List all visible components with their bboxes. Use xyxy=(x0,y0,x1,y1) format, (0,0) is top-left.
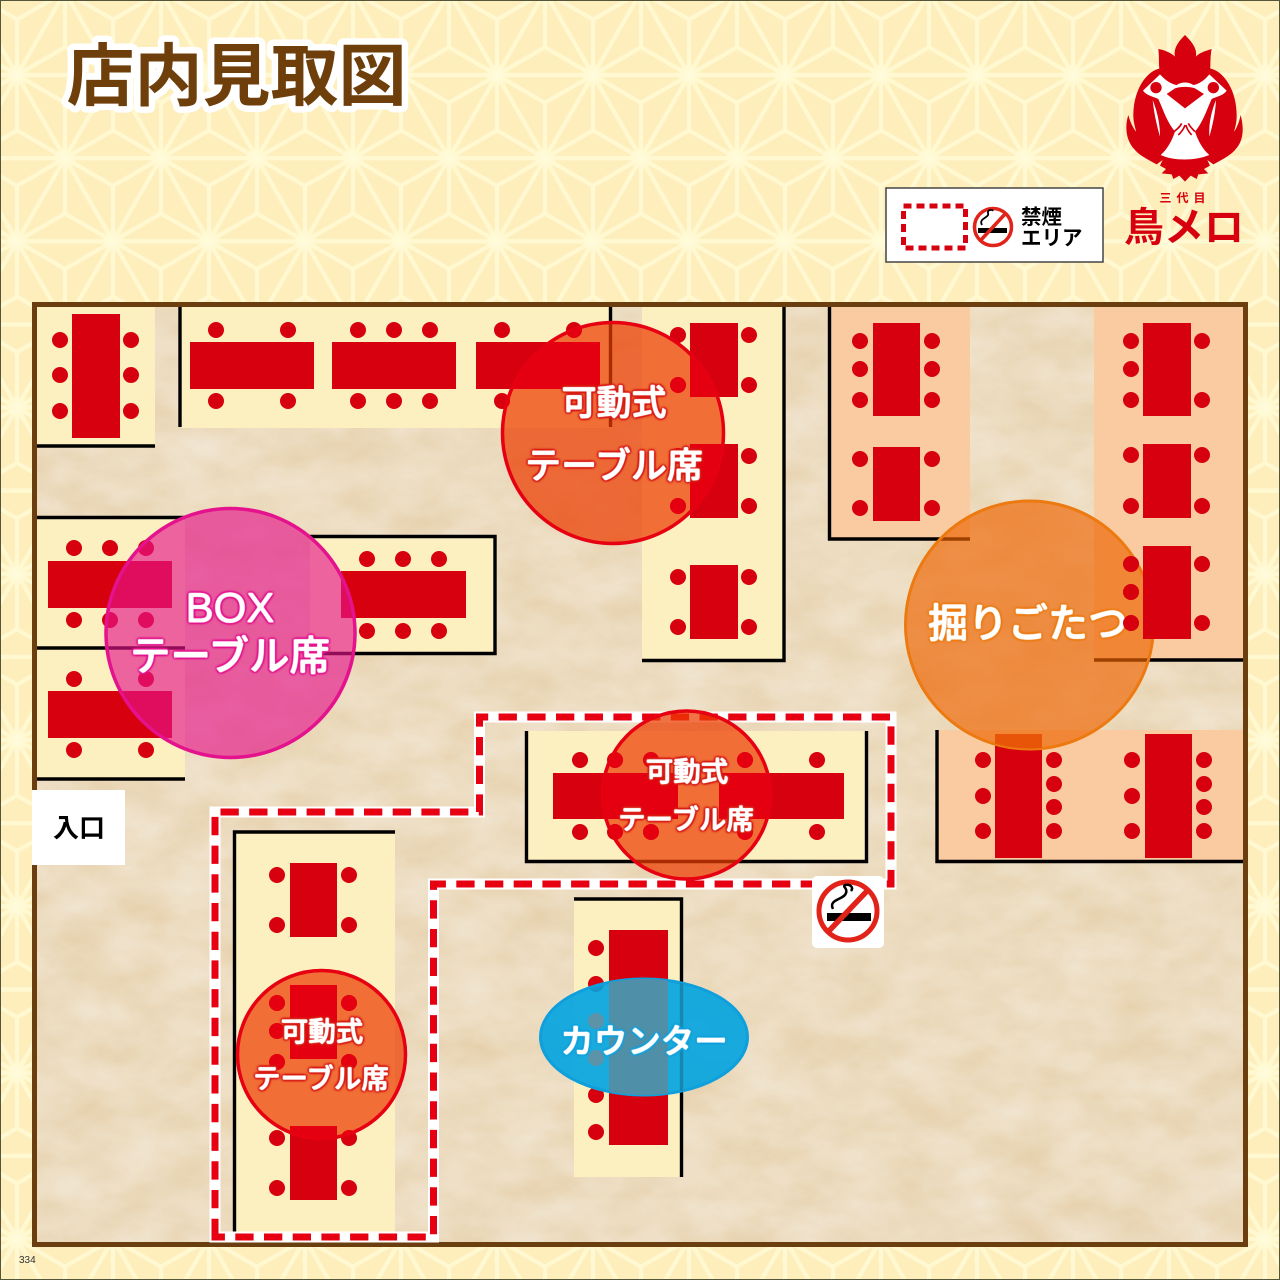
seats xyxy=(852,333,940,516)
panel: counter xyxy=(574,899,682,1177)
floor border xyxy=(34,304,1246,1244)
page number: 334 xyxy=(19,1255,36,1266)
legend dashed box xyxy=(904,206,966,248)
entrance label xyxy=(32,790,125,865)
callout: BOX table seats: BOX xyxy=(186,584,274,631)
title: 店内見取図 xyxy=(66,39,407,115)
no-smoking area dashed outline xyxy=(215,717,891,1237)
logo small text: 三代目 xyxy=(1159,191,1211,205)
seats xyxy=(52,332,139,419)
panel: horigotatsu bottom xyxy=(937,730,1243,862)
callout: movable table seats middle: 可動式 xyxy=(646,756,728,787)
legend text: 禁煙 xyxy=(1021,206,1062,229)
seats xyxy=(359,551,447,639)
panel: right column tables xyxy=(642,307,784,660)
callout: counter: カウンター xyxy=(560,1024,728,1061)
legend: no-smoking area xyxy=(886,188,1103,262)
panel: middle tables in no-smoking area xyxy=(526,731,866,862)
callout: movable table seats middle xyxy=(601,709,772,881)
seats xyxy=(269,867,357,1196)
callout: horigotatsu xyxy=(906,501,1155,750)
panel: horigotatsu top xyxy=(830,307,970,539)
seats xyxy=(1123,333,1210,631)
callout: movable table seats top: 可動式 xyxy=(561,384,667,423)
callout: movable table seats top: テーブル席 xyxy=(525,445,703,486)
callout: counter xyxy=(540,970,748,1100)
callout: movable table seats middle: テーブル席 xyxy=(618,804,754,835)
callout: horigotatsu: 掘りごたつ xyxy=(928,602,1128,646)
panel: horigotatsu right xyxy=(1094,307,1243,660)
seats xyxy=(975,752,1212,839)
seats xyxy=(66,540,154,758)
panel: lower-left tables in no-smoking area xyxy=(234,832,395,1232)
panel: left box tables xyxy=(37,518,185,779)
legend text: エリア xyxy=(1021,227,1082,250)
callout: BOX table seats: テーブル席 xyxy=(130,633,330,679)
callout: movable table seats lower: 可動式 xyxy=(281,1016,363,1047)
seats xyxy=(208,322,582,409)
seats xyxy=(588,940,604,1140)
floor plan xyxy=(32,304,1246,1244)
callout: movable table seats top xyxy=(500,320,726,546)
panel: top-left booth xyxy=(37,307,155,446)
callout: movable table seats lower xyxy=(236,968,408,1140)
icon: no smoking xyxy=(974,208,1012,246)
callout: movable table seats lower: テーブル席 xyxy=(253,1063,389,1094)
logo name: 鳥メロ xyxy=(1124,206,1244,250)
floor xyxy=(34,304,1246,1244)
seats xyxy=(670,327,757,635)
callout: BOX table seats xyxy=(106,508,355,758)
seats xyxy=(572,752,825,840)
icon: rooster xyxy=(1126,35,1243,182)
panel: right box table xyxy=(310,536,495,654)
entrance label: 入口 xyxy=(53,813,105,843)
panel: top row tables xyxy=(180,307,610,428)
logo: 三代目 鳥メロ xyxy=(1124,35,1244,250)
no-smoking sign xyxy=(812,876,884,948)
